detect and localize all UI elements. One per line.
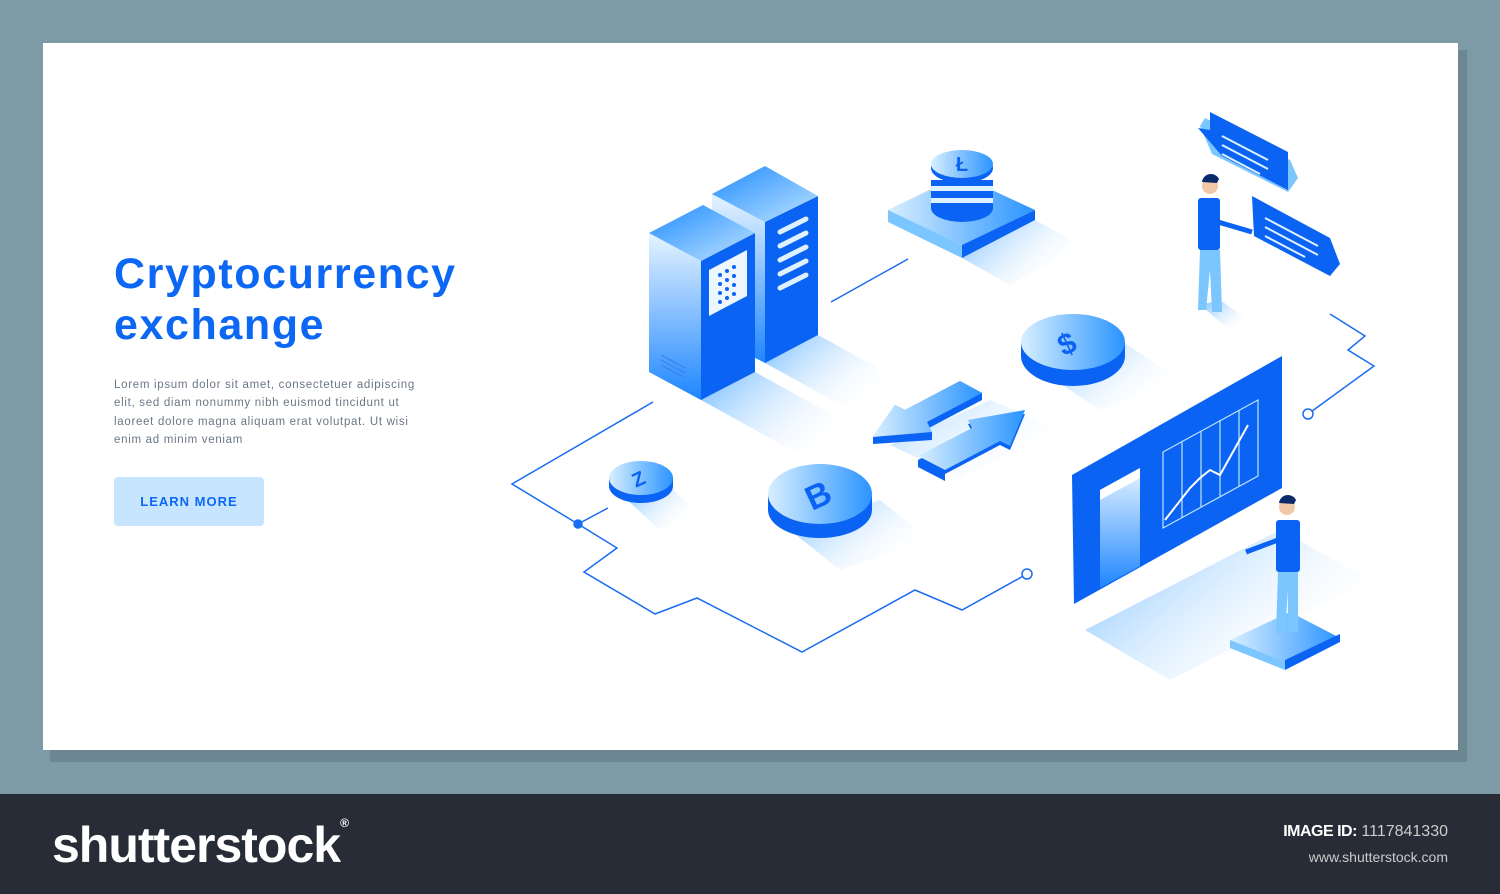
icon: dollar coin xyxy=(1021,314,1180,410)
icon: exchange arrows xyxy=(873,381,1060,481)
panel: white card xyxy=(43,43,1458,750)
text block: lorem ipsum: laoreet dolore magna aliquam erat volutpat. Ut wisi xyxy=(114,416,409,428)
icon: person bottom with platform xyxy=(1230,495,1340,670)
button: learn more xyxy=(114,477,264,526)
footer bar xyxy=(0,794,1500,894)
icon: server towers xyxy=(649,166,900,458)
text block: lorem ipsum: enim ad minim veniam xyxy=(114,434,243,446)
icon: bitcoin coin: B xyxy=(799,473,838,518)
logo: shutterstock: shutterstock® xyxy=(52,816,348,873)
url: www.shutterstock.com xyxy=(1309,849,1448,865)
text block: lorem ipsum: Lorem ipsum dolor sit amet, consectetuer adipiscing xyxy=(114,379,415,391)
icon: litecoin stack on platform xyxy=(888,150,1080,285)
icon: chat bubbles xyxy=(1198,112,1340,276)
title: exchange xyxy=(114,301,325,349)
icon: bitcoin coin xyxy=(768,464,930,570)
icon: person top xyxy=(1198,174,1255,330)
title: Cryptocurrency xyxy=(114,250,457,298)
connector lines xyxy=(512,259,1374,652)
image id: IMAGE ID: 1117841330 xyxy=(1283,823,1448,840)
text block: lorem ipsum xyxy=(114,379,415,446)
text block: lorem ipsum: elit, sed diam nonummy nibh euismod tincidunt ut xyxy=(114,397,399,409)
icon: chart board xyxy=(1072,356,1370,680)
title xyxy=(114,250,457,349)
icon: dollar coin: $ xyxy=(1053,326,1082,363)
icon: litecoin stack on platform: Ł xyxy=(956,154,968,176)
button: learn more: LEARN MORE xyxy=(140,494,238,509)
icon: zcash coin: Z xyxy=(629,467,649,492)
icon: zcash coin xyxy=(609,461,700,530)
